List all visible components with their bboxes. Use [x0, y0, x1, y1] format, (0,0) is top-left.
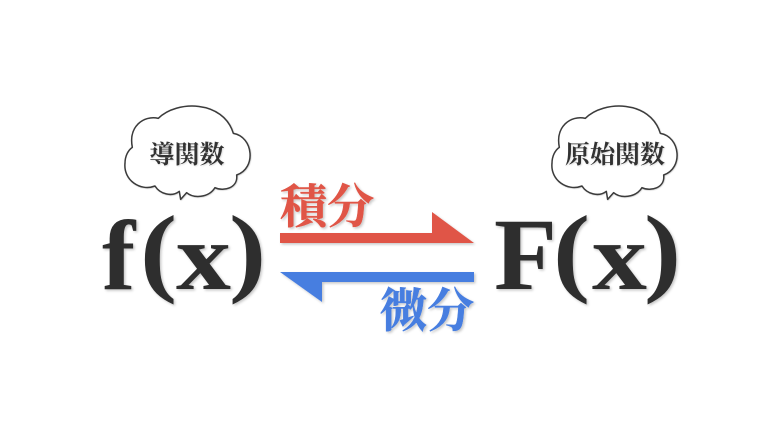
label: 積分: 積分 [280, 182, 374, 234]
formula: f(x): ( [140, 195, 177, 305]
formula: f(x): ) [229, 195, 266, 305]
label: 原始関数: 原始関数 [565, 141, 665, 169]
label: 微分: 微分 [380, 286, 474, 338]
formula: F(x): ( [553, 195, 590, 305]
formula: f(x) [102, 195, 266, 311]
formula: f(x): f [102, 200, 137, 311]
arrow: integration [280, 212, 474, 243]
formula: F(x): F [494, 198, 557, 312]
formula: f(x): x [176, 205, 231, 310]
formula: F(x): x [592, 205, 647, 310]
thought cloud: derivative [125, 106, 250, 199]
formula: F(x) [494, 195, 681, 312]
thought cloud: antiderivative [552, 106, 677, 199]
label: 導関数: 導関数 [149, 141, 225, 169]
formula: F(x): ) [644, 195, 681, 305]
arrow: differentiation [280, 272, 474, 302]
